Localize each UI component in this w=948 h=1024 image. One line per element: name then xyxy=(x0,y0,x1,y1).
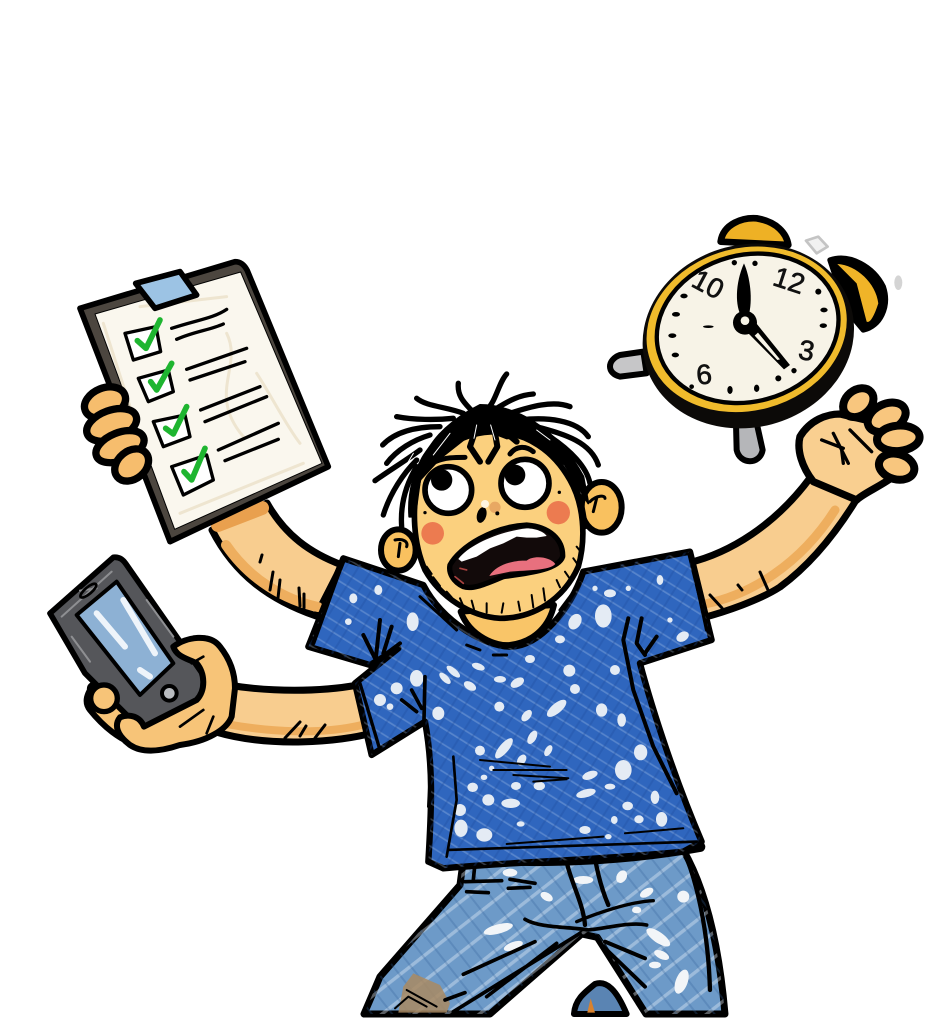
cheeks xyxy=(421,522,444,545)
mouth xyxy=(450,525,563,588)
hand: thumb and palm xyxy=(117,638,235,751)
nose xyxy=(423,491,561,524)
tick marks xyxy=(668,260,828,394)
worn patch xyxy=(398,973,450,1013)
dial numerals: 10 xyxy=(687,263,729,305)
minute hand xyxy=(737,263,751,317)
jean seams xyxy=(395,847,710,1012)
right ear xyxy=(582,482,622,533)
t-shirt xyxy=(308,552,712,868)
screen glare xyxy=(97,600,155,677)
raised hand and alarm clock xyxy=(610,218,921,500)
clock case xyxy=(622,220,875,452)
gold ring xyxy=(628,225,866,434)
phone inner edge xyxy=(62,572,173,662)
hand behind phone xyxy=(87,684,152,746)
phone and hand xyxy=(50,557,235,751)
dial numerals: 6 xyxy=(695,358,713,391)
home button xyxy=(162,686,177,701)
jean legs xyxy=(364,850,725,1014)
shirt hatching xyxy=(308,552,712,868)
eyebrows xyxy=(435,447,533,462)
back shoe xyxy=(574,983,627,1014)
eyes xyxy=(425,459,549,513)
paper stains xyxy=(103,297,303,513)
bottom foot xyxy=(736,420,763,461)
paper xyxy=(95,272,322,529)
hand: gripping clipboard xyxy=(80,381,155,488)
hour hand xyxy=(747,322,790,369)
board xyxy=(80,262,328,542)
white paint spots xyxy=(345,575,691,842)
shirt body xyxy=(308,552,712,868)
right bell xyxy=(830,258,885,330)
clipboard xyxy=(80,262,328,542)
top bell xyxy=(721,218,788,245)
denim texture xyxy=(364,850,725,1014)
palm creases xyxy=(180,657,213,733)
phone screen xyxy=(77,582,173,695)
task lines xyxy=(172,309,278,461)
left ear xyxy=(381,529,416,571)
phone body xyxy=(50,557,205,730)
speaker xyxy=(79,582,98,600)
hair xyxy=(375,374,598,527)
chin xyxy=(461,605,554,645)
arm: right raised xyxy=(688,478,858,618)
finger xyxy=(91,685,117,712)
stubble xyxy=(427,547,581,613)
jeans and back shoe xyxy=(364,847,725,1014)
checkboxes xyxy=(125,327,213,495)
bell hammer xyxy=(806,237,828,253)
check marks xyxy=(137,320,205,480)
shirt folds and cuffs xyxy=(313,553,707,857)
face xyxy=(414,432,583,618)
orange shoe lining xyxy=(587,998,595,1013)
clip xyxy=(136,272,197,308)
ear creases xyxy=(395,496,605,557)
hand: palm xyxy=(799,414,900,500)
dial numerals: 3 xyxy=(796,334,817,367)
hand: creases xyxy=(822,430,872,463)
motion mark xyxy=(894,275,902,290)
dial numerals xyxy=(687,261,817,391)
dial numerals: 12 xyxy=(770,261,809,300)
arm: upper left holding clipboard xyxy=(212,503,342,616)
head xyxy=(375,374,622,645)
arm: lower left holding phone xyxy=(216,685,372,742)
denim highlights xyxy=(483,868,692,996)
left foot xyxy=(610,352,647,377)
dial xyxy=(640,234,855,423)
center hub xyxy=(733,311,757,335)
hand: fingers xyxy=(837,382,921,484)
